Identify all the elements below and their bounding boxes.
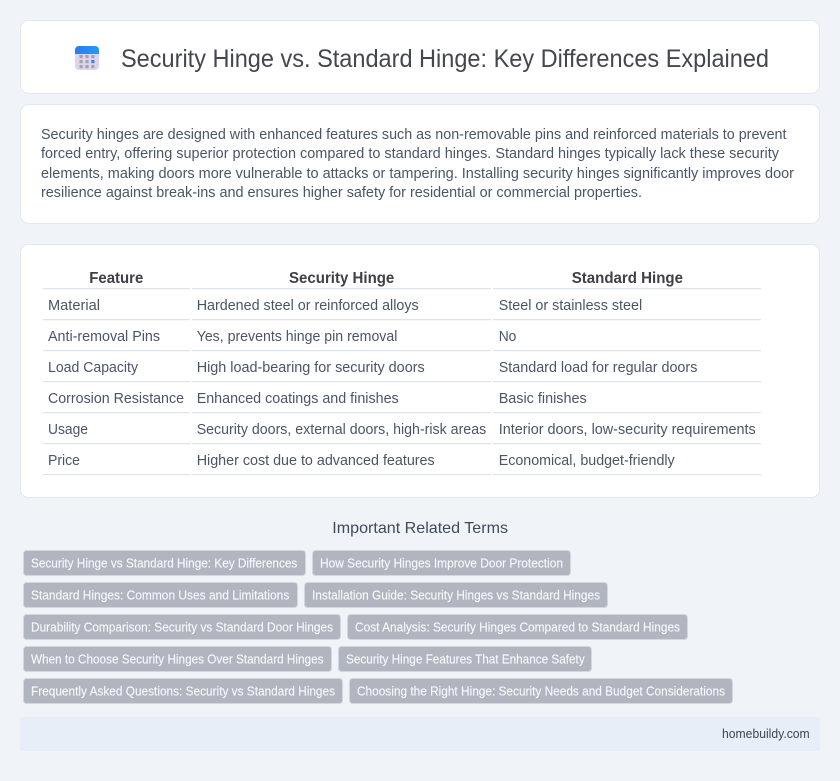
footer source text: homebuildy.com	[722, 727, 810, 741]
panel: introduction	[20, 104, 820, 224]
table row: usage: Interior doors, low-security requirements	[499, 422, 756, 438]
text block: introduction paragraph: resilience against break-ins and ensures higher safety for residential or commercial properties.	[41, 185, 642, 201]
text block: introduction paragraph: forced entry, offering superior protection compared to standard hinges. Standard hinges typically lack these security	[41, 146, 780, 162]
table header row: Feature	[89, 270, 143, 287]
table row: corrosion resistance	[43, 391, 761, 413]
tag: Cost Analysis: Security Hinges Compared to Standard Hinges	[355, 620, 680, 634]
table row: load capacity: High load-bearing for security doors	[197, 360, 425, 376]
table row: material: Material	[48, 298, 100, 314]
table header row: Standard Hinge	[572, 270, 683, 287]
table row: corrosion resistance: Enhanced coatings and finishes	[197, 391, 399, 407]
heading: important related terms: Important Related Terms	[332, 520, 508, 537]
title: Security Hinge vs. Standard Hinge: Key Differences Explained	[121, 45, 769, 73]
panel: comparison table	[20, 244, 820, 498]
tag	[24, 646, 332, 672]
table row: anti-removal pins: No	[499, 329, 516, 345]
tag	[312, 550, 570, 576]
panel: related term tags	[24, 550, 732, 704]
table row: corrosion resistance: Corrosion Resistance	[48, 391, 184, 407]
tag: Security Hinge Features That Enhance Safety	[346, 652, 585, 666]
table row: usage: Usage	[48, 422, 88, 438]
panel: title header	[20, 20, 820, 94]
icon: calendar	[75, 46, 99, 70]
table row: load capacity: Load Capacity	[48, 360, 139, 376]
tag	[24, 582, 298, 608]
text block: introduction paragraph: Security hinges are designed with enhanced features such as non-removable pins and reinforced materials to prevent	[41, 127, 787, 143]
tag	[338, 646, 592, 672]
footer	[20, 717, 820, 751]
table row: anti-removal pins: Yes, prevents hinge pin removal	[197, 329, 397, 345]
table row: material: Hardened steel or reinforced alloys	[197, 298, 419, 314]
table row: usage: Security doors, external doors, high-risk areas	[197, 422, 486, 438]
text block: introduction paragraph: elements, making doors more vulnerable to attacks or tampering. Installing security hinges significantly improves door	[41, 166, 794, 182]
table row: anti-removal pins	[43, 329, 761, 351]
tag: Durability Comparison: Security vs Standard Door Hinges	[31, 620, 333, 634]
tag: When to Choose Security Hinges Over Standard Hinges	[31, 652, 324, 666]
tag: How Security Hinges Improve Door Protection	[320, 556, 563, 570]
table row: corrosion resistance: Basic finishes	[499, 391, 587, 407]
tag: Security Hinge vs Standard Hinge: Key Differences	[31, 556, 297, 570]
table header row	[43, 270, 761, 289]
tag: Installation Guide: Security Hinges vs Standard Hinges	[312, 588, 600, 602]
table row: load capacity	[43, 360, 761, 382]
tag	[24, 614, 340, 640]
table row: price: Economical, budget-friendly	[499, 453, 675, 469]
tag	[24, 550, 306, 576]
table row: load capacity: Standard load for regular doors	[499, 360, 697, 376]
tag	[348, 614, 688, 640]
text block: introduction paragraph	[41, 127, 794, 201]
table row: usage	[43, 422, 761, 444]
table row: material: Steel or stainless steel	[499, 298, 642, 314]
table row: anti-removal pins: Anti-removal Pins	[48, 329, 160, 345]
tag: Choosing the Right Hinge: Security Needs and Budget Considerations	[357, 684, 725, 698]
tag	[24, 678, 342, 704]
table header row: Security Hinge	[289, 270, 394, 287]
tag: Frequently Asked Questions: Security vs Standard Hinges	[31, 684, 335, 698]
table row: material	[43, 298, 761, 320]
tag	[304, 582, 608, 608]
table row: price	[43, 453, 761, 475]
table row: price: Higher cost due to advanced features	[197, 453, 435, 469]
tag	[350, 678, 732, 704]
table row: price: Price	[48, 453, 80, 469]
tag: Standard Hinges: Common Uses and Limitations	[31, 588, 289, 602]
